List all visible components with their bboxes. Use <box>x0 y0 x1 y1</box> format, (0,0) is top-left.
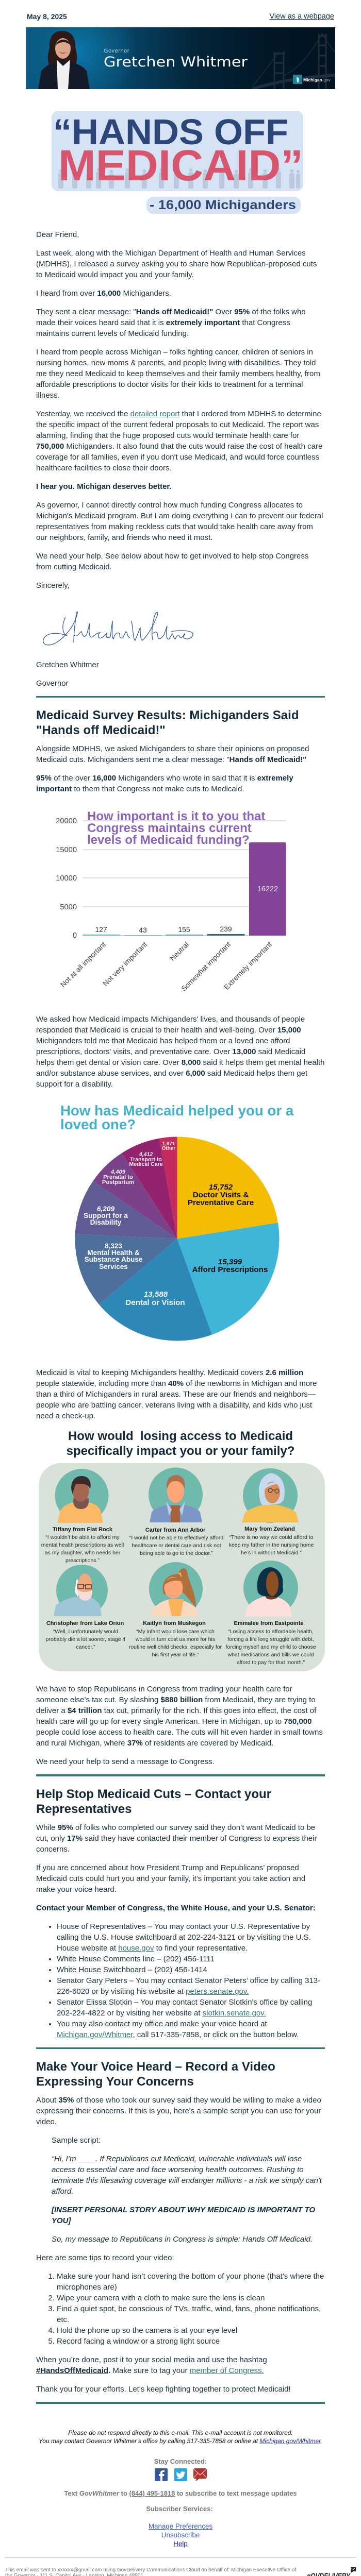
footer note: Please do not respond directly to this e-mail. This e-mail account is not monitored. <box>68 2429 293 2436</box>
subscriber links: Help <box>173 2540 188 2548</box>
letter: people across Michigan: affordable prescriptions to doctor visits for their kids to treatment for a terminal <box>36 380 303 389</box>
pie labels: Doctor Visits & <box>193 1191 249 1199</box>
survey statistic text <box>36 774 293 793</box>
text: how Medicaid impacts lives: Michiganders told me that Medicaid has helped them or a loved one afford <box>36 1037 290 1045</box>
letter: clear message: They sent a clear message: "Hands off Medicaid!" Over 95% of the folks who <box>36 308 306 316</box>
subscriber links <box>149 2522 212 2548</box>
text: contact stats: cut, only 17% said they have contacted their member of Congress to express their <box>36 1834 317 1843</box>
y axis labels: 20000 <box>56 817 77 825</box>
x axis labels: Not at all important <box>59 940 107 989</box>
sample script body: terminate this lifesaving coverage will endanger millions - a risk we simply can't <box>52 2176 322 2185</box>
text: contact stats <box>36 1823 317 1854</box>
text: video intro: video. <box>36 2117 57 2126</box>
subheading: contact list: Contact your Member of Congress, the White House, and your U.S. Senator: <box>36 1904 316 1912</box>
testimonial: Kaitlyn: “My infant would lose care which <box>136 1629 215 1635</box>
testimonial: Emmalee: afford to pay for that month.” <box>237 1659 305 1666</box>
tips list: Wipe your camera with a cloth to make sure the lens is clean <box>57 2294 265 2302</box>
value labels <box>95 885 278 934</box>
testimonial: Emmalee: forcing myself and my child to choose <box>225 1644 316 1650</box>
y axis labels: 0 <box>73 931 77 940</box>
avatar: Christopher <box>54 1565 108 1616</box>
pie title: How has Medicaid helped you or a <box>60 1103 294 1118</box>
testimonial: Tiffany: “I wouldn’t be able to afford my <box>45 1534 120 1540</box>
letter: people across Michigan: I heard from people across Michigan – folks fighting cancer, children of seniors in <box>36 348 313 357</box>
text: send a message: We need your help to send a message to Congress. <box>36 1757 215 1766</box>
y axis labels: 5000 <box>60 903 77 911</box>
sample script body: afford. <box>52 2187 74 2196</box>
pie labels: 15,752 <box>209 1183 233 1192</box>
text: how Medicaid impacts lives <box>36 1015 325 1089</box>
pie labels: 6,209 <box>97 1205 115 1213</box>
pie title: loved one? <box>60 1116 136 1132</box>
text: hashtag: #HandsOffMedicaid. Make sure to tag your member of Congress. <box>36 2366 264 2375</box>
letter: responses count: I heard from over 16,000 Michiganders. <box>36 289 171 298</box>
tips list <box>48 2272 324 2346</box>
text: how Medicaid impacts lives: support for a disability. <box>36 1080 113 1089</box>
testimonial: Tiffany: Tiffany from Flat Rock <box>53 1527 113 1533</box>
text: stop Republicans in Congress: people could lose access to health care. The cuts will hit even harder in small towns <box>36 1728 323 1737</box>
panel: Michiganders' testimonials <box>39 1463 325 1671</box>
contact list: Senator Gary Peters – You may contact Senator Peters’ office by calling 313- <box>57 1976 320 1985</box>
avatar: Carter <box>149 1467 203 1522</box>
pie labels <box>84 1141 268 1307</box>
subscriber services label: Subscriber Services: <box>146 2505 213 2513</box>
letter: detailed report: coverage for all families, even if you don't use Medicaid, and would force countless <box>36 453 319 462</box>
text: stop Republicans in Congress: someone else’s tax cut. By slashing $880 billion from Medicaid, they are trying to <box>36 1696 316 1704</box>
text: how Medicaid impacts lives: helps them get dental or vision care. Over 8,000 said it helps them get mental health <box>36 1058 325 1067</box>
testimonial: Christopher <box>46 1620 125 1650</box>
Michigan.gov logo: Michigan.gov <box>303 77 331 82</box>
tips list: Find a quiet spot, be conscious of TVs, traffic, wind, fans, phone notifications, <box>57 2304 321 2313</box>
tips list: microphones are) <box>57 2283 117 2292</box>
letter: people across Michigan: me they need Medicaid to keep themselves and their family members healthy, from <box>36 369 320 378</box>
letter: as governor <box>36 501 323 542</box>
testimonial: Carter: “I would not be able to effectively afford <box>129 1535 223 1541</box>
sample script body: “Hi, I’m ____. If Republicans cut Medicaid, vulnerable individuals will lose <box>52 2155 302 2163</box>
testimonial: Christopher: cancer.” <box>76 1644 95 1650</box>
sample script label: Sample script: <box>52 2136 101 2145</box>
letter: detailed report: the specific impact of the current federal proposals to cut Medicaid. The report was <box>36 420 319 429</box>
survey statistic text: 95% of the over 16,000 Michiganders who wrote in said that it is extremely <box>36 774 293 783</box>
letter: we need your help: from cutting Medicaid. <box>36 563 112 571</box>
pie labels: Afford Prescriptions <box>192 1265 268 1274</box>
chart title: levels of Medicaid funding? <box>87 833 250 847</box>
testimonial: Kaitlyn: would in turn cost us more for his <box>135 1636 215 1642</box>
testimonial: Carter <box>129 1527 223 1556</box>
text: stop Republicans in Congress: We have to stop Republicans in Congress from trading your health care for <box>36 1685 292 1693</box>
survey statistic text: important to them that Congress not make cuts to Medicaid. <box>36 785 244 793</box>
text: hashtag: When you’re done, post it to your social media and use the hashtag <box>36 2355 267 2364</box>
date: May 8, 2025 <box>27 12 67 21</box>
value labels: 16222 <box>257 885 278 893</box>
social icons <box>155 2468 207 2481</box>
testimonial: Christopher: “Well, I unfortunately would <box>53 1629 118 1635</box>
banner: Governor Gretchen Whitmer <box>26 27 335 89</box>
heading: record a video: Expressing Your Concerns <box>36 2075 194 2089</box>
pie labels: Medical Care <box>129 1161 163 1167</box>
survey intro text: Alongside MDHHS, we asked Michiganders to share their opinions on proposed <box>36 744 309 753</box>
pie labels: Postpartum <box>102 1179 134 1185</box>
text: Medicaid is vital: people statewide, including more than 40% of the newborns in Michigan and more <box>36 1379 317 1388</box>
banner title text: Gretchen Whitmer <box>104 54 248 70</box>
pie chart: how Medicaid helped <box>60 1103 294 1341</box>
testimonial: Tiffany: as my daughter, who needs her <box>45 1550 121 1556</box>
avatar: Emmalee <box>243 1561 298 1617</box>
text: how Medicaid impacts lives: We asked how Medicaid impacts Michiganders' lives, and thousands of people <box>36 1015 305 1024</box>
text: video intro: About 35% of those who took our survey said they would be willing to make a video <box>36 2096 321 2105</box>
pie slices <box>75 1137 279 1341</box>
pie labels: 1,971 <box>162 1141 175 1147</box>
value labels: 127 <box>95 925 107 934</box>
sample script personal story: [INSERT PERSONAL STORY ABOUT WHY MEDICAID IS IMPORTANT TO <box>52 2206 315 2214</box>
value labels: 155 <box>178 925 190 934</box>
pie labels: 4,409 <box>110 1169 126 1175</box>
letter: people across Michigan <box>36 348 320 400</box>
letter: as governor: representatives from making reckless cuts that would take health care away from <box>36 522 313 531</box>
subscriber links: Unsubscribe <box>161 2531 200 2539</box>
text: Medicaid is vital: than a third of Michiganders in rural areas. These are our friends and neighbors— <box>36 1390 316 1399</box>
testimonial: Kaitlyn <box>129 1620 222 1658</box>
x axis labels <box>59 940 273 993</box>
pie labels: Substance Abuse <box>85 1256 143 1263</box>
text: video intro <box>36 2096 321 2126</box>
attribution pill: - 16,000 Michiganders <box>150 198 296 212</box>
letter: sign-off: Sincerely, <box>36 581 70 590</box>
x axis labels: Not very important <box>101 940 149 988</box>
text: stop Republicans in Congress <box>36 1685 323 1748</box>
testimonial: Emmalee: “Losing access to affordable health, <box>228 1629 314 1635</box>
text: Medicaid is vital: need a check-up. <box>36 1412 95 1420</box>
testimonial: Mary <box>229 1526 314 1556</box>
tips list: Hold the phone up so the camera is at your eye level <box>57 2326 237 2335</box>
testimonial: Kaitlyn: routine well child checks, especially for <box>129 1644 222 1650</box>
value labels: 43 <box>139 926 147 934</box>
testimonial: Kaitlyn: Kaitlyn from Muskegon <box>143 1620 206 1626</box>
letter: detailed report: Yesterday, we received the detailed report that I ordered from MDHHS to determine <box>36 410 321 418</box>
letter: as governor: As governor, I cannot directly control how much funding Congress allocates to <box>36 501 303 510</box>
stay connected label: Stay Connected: <box>154 2458 207 2465</box>
sample script body: access to essential care and face worsening health outcomes. Rushing to <box>52 2165 304 2174</box>
text: contact stats: While 95% of folks who completed our survey said they don’t want Medicaid to be <box>36 1823 315 1832</box>
y axis labels <box>56 817 77 940</box>
heading: help stop Medicaid cuts: Representatives <box>36 1802 132 1816</box>
text: how Medicaid impacts lives: and/or substance abuse services, and over 6,000 said Medicaid helps them get <box>36 1069 307 1078</box>
signature title: Governor <box>36 679 69 688</box>
testimonial: Mary: Mary from Zeeland <box>244 1526 295 1532</box>
testimonial: Emmalee <box>225 1620 316 1666</box>
text: how Medicaid impacts lives: prescriptions, doctors' visits, and preventative care. Over 13,000 said Medicaid <box>36 1047 305 1056</box>
letter: we need your help <box>36 552 308 571</box>
text message subscribe: Text GovWhitmer to (844) 495-1818 to subscribe to text message updates <box>64 2489 297 2497</box>
testimonial: Mary: keep my father in the nursing home <box>229 1542 314 1548</box>
testimonial: Tiffany <box>41 1527 124 1564</box>
bars <box>83 842 286 936</box>
heading: survey results <box>36 708 299 737</box>
text: stop Republicans in Congress: health care will go up for every single American. Here in Michigan, up to 750,000 <box>36 1717 311 1726</box>
letter: clear message: maintains current levels of Medicaid funding. <box>36 329 189 338</box>
letter: survey intro <box>36 249 317 279</box>
icon: Mackinac bridge silhouette <box>252 33 335 89</box>
pie labels: Other <box>162 1146 175 1151</box>
letter: we need your help: We need your help. See below about how to get involved to help stop Congress <box>36 552 308 561</box>
letter: as governor: our neighbors, family, and friends who need it most. <box>36 533 212 542</box>
pie labels: Preventative Care <box>188 1198 254 1207</box>
bar chart: importance of Medicaid funding <box>56 809 286 993</box>
letter: survey intro: Last week, along with the Michigan Department of Health and Human Services <box>36 249 306 258</box>
testimonial: Emmalee: forcing a life long struggle with debt, <box>227 1636 314 1642</box>
contact list: You may also contact my office and make your voice heard at <box>57 2020 267 2028</box>
testimonial: Carter: being able to go to the doctor.” <box>140 1550 213 1556</box>
icon: facebook <box>155 2468 168 2481</box>
testimonial: Mary: he’s in without Medicaid.” <box>241 1550 302 1556</box>
pie labels: Disability <box>90 1218 122 1226</box>
letter: greeting: Dear Friend, <box>36 230 79 239</box>
letter: I hear you: I hear you. Michigan deserves better. <box>36 482 172 491</box>
text: thank you: Thank you for your efforts. Let's keep fighting together to protect Medicaid! <box>36 2385 291 2394</box>
tips list: Record facing a window or a strong light source <box>57 2337 220 2346</box>
text: stop Republicans in Congress: and rural Michigan, where 37% of residents are covered by Medicaid. <box>36 1739 273 1748</box>
testimonial: Carter: healthcare or dental care and risk not <box>132 1543 221 1549</box>
letter: survey intro: (MDHHS), I released a survey asking you to share how Republican-proposed cuts <box>36 260 317 268</box>
testimonial: Carter: Carter from Ann Arbor <box>145 1527 206 1533</box>
survey intro text <box>36 744 309 764</box>
heading: survey results: "Hands off Medicaid!" <box>36 723 166 737</box>
letter: people across Michigan: nursing homes, new moms & parents, and people living with disabilities. They told <box>36 359 316 367</box>
contact list: House website at house.gov to find your representative. <box>57 1944 248 1953</box>
pie labels: Prenatal to <box>103 1174 133 1180</box>
text: hashtag <box>36 2355 267 2375</box>
letter: clear message <box>36 308 306 338</box>
testimonial: Tiffany: prescriptions.” <box>65 1557 100 1564</box>
contact list: White House Switchboard – (202) 456-1414 <box>57 1965 207 1974</box>
headline line two: MEDICAID” <box>58 141 303 190</box>
text: how Medicaid impacts lives: responded that Medicaid is crucial to their health and well-being. Over 15,000 <box>36 1026 301 1035</box>
contact list: 226-6020 or by visiting his website at peters.senate.gov. <box>57 1987 249 1996</box>
legal footer: This email was sent to xxxxxx@gmail.com using GovDelivery Communications Cloud on behalf of: Michigan Executive Office of <box>5 2567 296 2573</box>
chart title: How important is it to you that <box>87 809 265 823</box>
letter: detailed report <box>36 410 322 472</box>
headline line one: “HANDS OFF <box>53 112 288 152</box>
text: take action <box>36 1863 305 1894</box>
pie labels: 15,399 <box>218 1258 242 1266</box>
text: Medicaid is vital: people who are battling cancer, veterans living with a disability, and kids who just <box>36 1401 312 1410</box>
heading: help stop Medicaid cuts <box>36 1787 271 1816</box>
banner title text: Governor <box>104 48 129 54</box>
x axis labels: Extremely important <box>222 940 273 991</box>
sample script personal story: YOU] <box>52 2216 71 2225</box>
contact list: House of Representatives – You may contact your U.S. Representative by <box>57 1922 310 1931</box>
pie labels: 8,323 <box>105 1242 122 1250</box>
heading: how would losing access: How would losing access to Medicaid specifically impact you or your family? <box>67 1429 294 1458</box>
survey intro text: Medicaid cuts. Michiganders sent me a clear message: "Hands off Medicaid!" <box>36 755 306 764</box>
icon: twitter <box>174 2468 187 2481</box>
letter: survey intro: to Medicaid would impact you and your family. <box>36 270 194 279</box>
pie labels: 13,588 <box>144 1290 168 1299</box>
sample script closing: So, my message to Republicans in Congress is simple: Hands Off Medicaid. <box>52 2235 313 2244</box>
avatar: Mary <box>242 1468 299 1523</box>
sample script personal story <box>52 2206 315 2225</box>
testimonial: Emmalee: Emmalee from Eastpointe <box>234 1620 304 1626</box>
y axis labels: 10000 <box>56 874 77 883</box>
letter: detailed report: alarming, finding that the huge proposed cuts would terminate health care for <box>36 431 299 440</box>
hero graphic: "Hands off Medicaid" quote <box>52 111 303 214</box>
avatar: Kaitlyn <box>149 1562 203 1616</box>
text: video intro: expressing their concerns. If this is you, here's a sample script you can use for your <box>36 2107 321 2115</box>
text: stop Republicans in Congress: deliver a $4 trillion tax cut, primarily for the rich. If this goes into effect, the cost of <box>36 1706 316 1715</box>
text: take action: Medicaid cuts could hurt you and your family, it’s important you take action and <box>36 1874 305 1883</box>
tips list: Make sure your hand isn’t covering the bottom of your phone (that’s where the <box>57 2272 324 2281</box>
GovDelivery logo <box>306 2567 356 2576</box>
heading: record a video: Make Your Voice Heard – Record a Video <box>36 2060 275 2074</box>
contact list: calling the U.S. House switchboard at 202-224-3121 or by visiting the U.S. <box>57 1933 311 1942</box>
letter: detailed report: 750,000 Michiganders. It also found that the cuts would raise the cost of health care <box>36 442 322 451</box>
pie labels: Services <box>99 1263 128 1270</box>
testimonial: Tiffany: mental health prescriptions as well <box>41 1542 124 1548</box>
pie title <box>60 1103 294 1132</box>
chart title: Congress maintains current <box>87 821 252 835</box>
footer note <box>39 2429 322 2444</box>
x axis labels: Neutral <box>168 940 190 962</box>
contact list: 202-224-4822 or by visiting her website at slotkin.senate.gov. <box>57 2009 266 2018</box>
testimonial: Christopher: Christopher from Lake Orion <box>46 1620 124 1626</box>
crowd silhouettes <box>58 168 300 189</box>
tips list: etc. <box>57 2315 69 2324</box>
text: Medicaid is vital <box>36 1368 317 1420</box>
heading: record a video <box>36 2060 275 2089</box>
avatar: Tiffany <box>55 1469 108 1523</box>
pie labels: Support for a <box>84 1212 128 1219</box>
icon: email alert <box>193 2468 207 2481</box>
value labels: 239 <box>220 925 232 933</box>
letter: people across Michigan: illness. <box>36 391 60 400</box>
banner title text <box>104 48 248 70</box>
letter: clear message: made their voices heard said that it is extremely important that Congress <box>36 318 290 327</box>
contact list: White House Comments line – (202) 456-1111 <box>57 1955 215 1963</box>
testimonial: Christopher: probably die a lot sooner, stage 4 <box>46 1636 125 1642</box>
subscriber links: Manage Preferences <box>149 2522 212 2530</box>
contact list <box>49 1922 320 2039</box>
text: take action: make your voice heard. <box>36 1885 117 1894</box>
icon: Governor portrait <box>38 31 90 89</box>
tips intro: Here are some tips to record your video: <box>36 2253 174 2262</box>
letter: detailed report: healthcare facilities to close their doors. <box>36 464 172 472</box>
chart title <box>87 809 265 847</box>
pie labels: Transport to <box>130 1157 162 1163</box>
letter: as governor: Michigan's Medicaid program. But I am doing everything I can to prevent our federal <box>36 512 323 520</box>
view as webpage link: View as a webpage <box>269 12 334 21</box>
pie labels: 4,412 <box>139 1151 153 1158</box>
signature <box>43 611 193 646</box>
signature name: Gretchen Whitmer <box>36 660 99 669</box>
text: Medicaid is vital: Medicaid is vital to keeping Michiganders healthy. Medicaid covers 2.6 million <box>36 1368 303 1377</box>
y axis labels: 15000 <box>56 846 77 854</box>
testimonial: Emmalee: what medications and bills we could <box>227 1652 314 1658</box>
x axis labels: Somewhat important <box>179 940 232 993</box>
footer note: You may contact Governor Whitmer’s office by calling 517-335-7858 or online at Michigan.gov/Whitmer. <box>39 2437 322 2444</box>
contact list: Michigan.gov/Whitmer, call 517-335-7858, or click on the button below. <box>57 2030 299 2039</box>
testimonial: Mary: “There is no way we could afford to <box>229 1534 314 1540</box>
text: take action: If you are concerned about how President Trump and Republicans’ proposed <box>36 1863 299 1872</box>
heading: help stop Medicaid cuts: Help Stop Medicaid Cuts – Contact your <box>36 1787 271 1801</box>
pie labels: Mental Health & <box>87 1249 140 1257</box>
contact list: Senator Elissa Slotkin – You may contact Senator Slotkin's office by calling <box>57 1998 312 2007</box>
testimonial: Kaitlyn: his first year of life.” <box>152 1652 199 1658</box>
pie labels: Dental or Vision <box>125 1298 185 1307</box>
sample script body <box>52 2155 322 2196</box>
Michigan.gov logo <box>293 75 331 84</box>
legal footer <box>5 2567 296 2576</box>
heading: survey results: Medicaid Survey Results: Michiganders Said <box>36 708 299 722</box>
text: contact stats: concerns. <box>36 1845 70 1854</box>
